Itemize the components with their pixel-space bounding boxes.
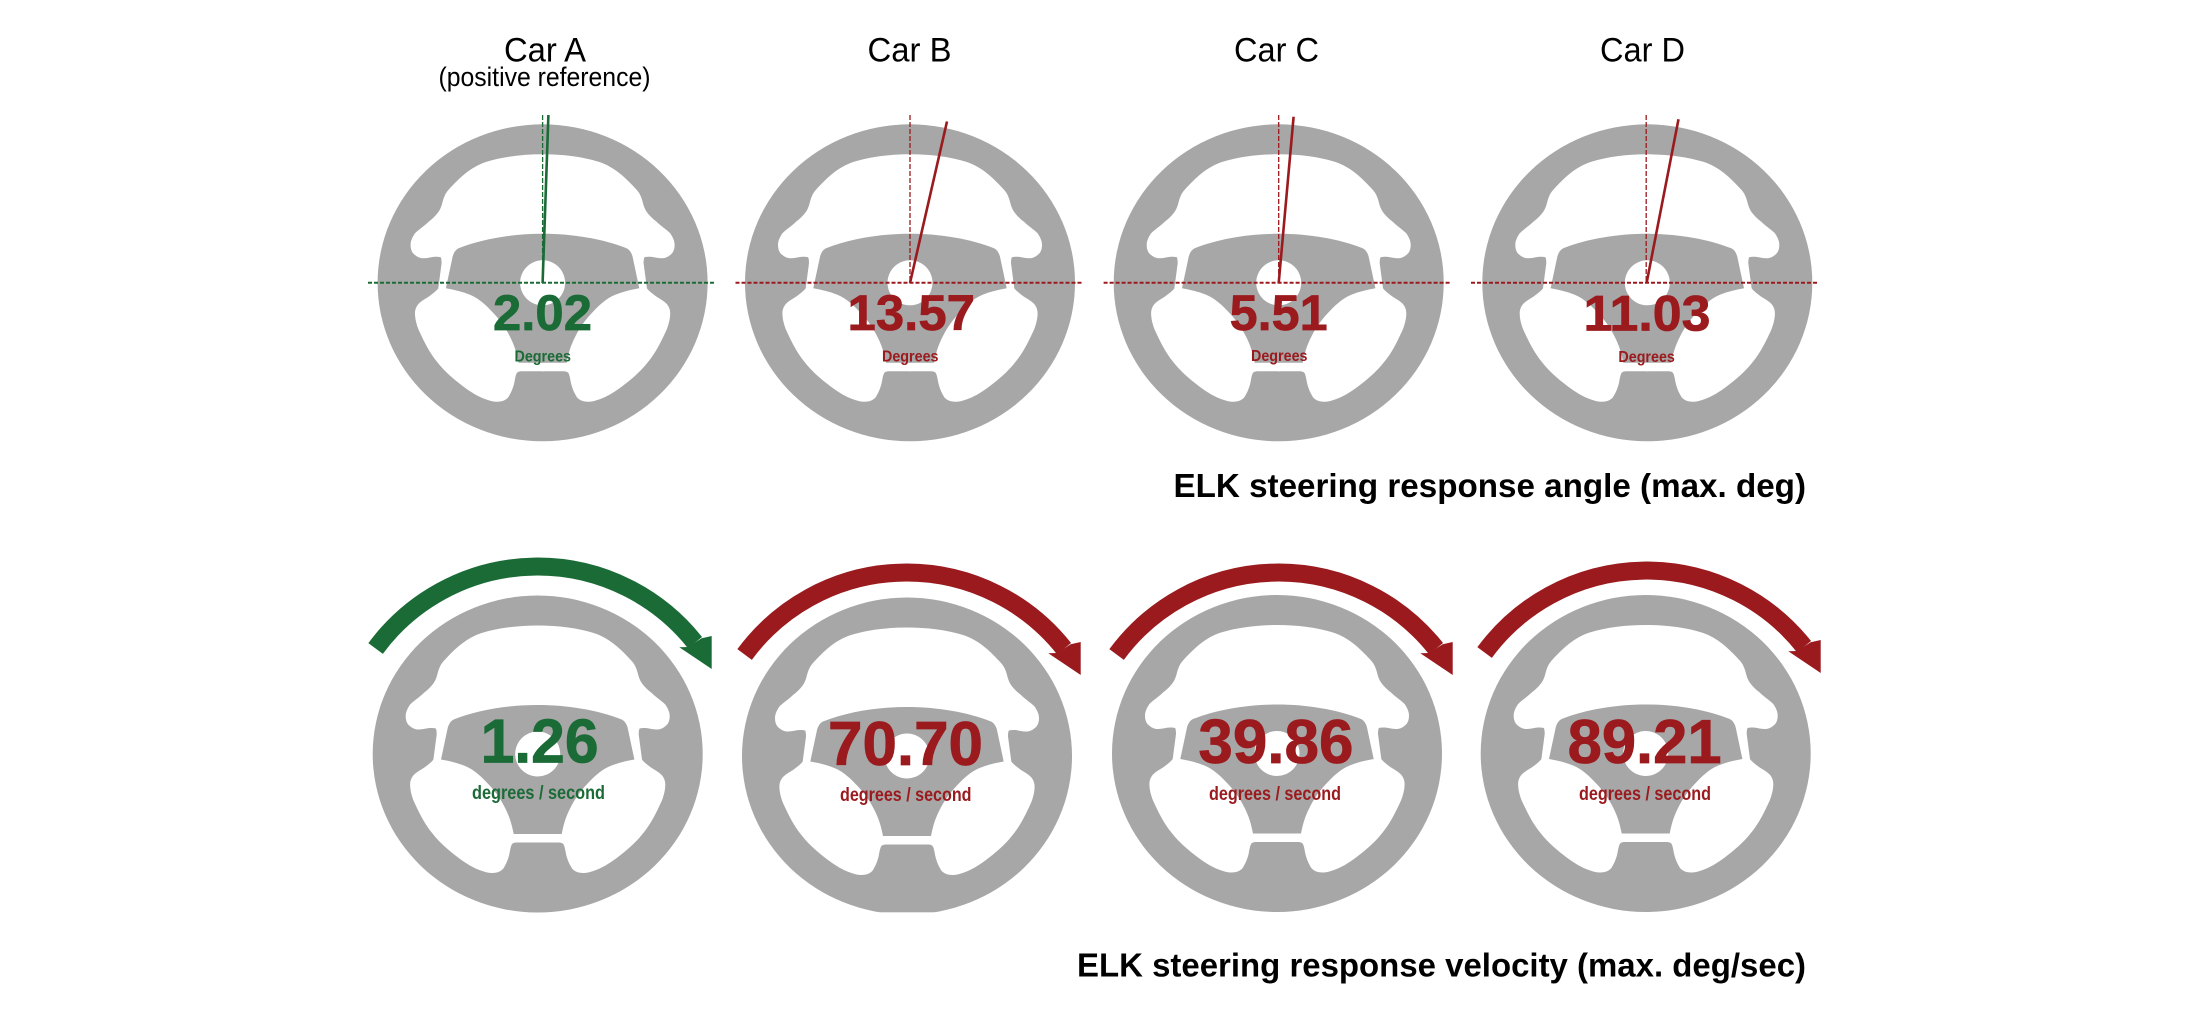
angle gauge: Car B: 13.57 [848, 285, 975, 341]
angle gauge: Car C [1104, 115, 1451, 441]
angle gauge: Car A [368, 115, 716, 441]
velocity gauge: Car A: degrees / second [472, 783, 605, 804]
angle gauge: Car A: 2.02 [493, 285, 592, 341]
angle gauge: Car C: 5.51 [1230, 285, 1328, 341]
angle gauge: Car D: 11.03 [1584, 286, 1710, 342]
velocity gauge: Car C [1112, 573, 1453, 912]
angle gauge: Car D [1471, 115, 1819, 441]
heading: Car C: Car C [1234, 32, 1319, 70]
angle gauge: Car B [736, 115, 1084, 441]
caption: velocity: ELK steering response velocity (max. deg/sec) [1077, 946, 1806, 984]
angle gauge: Car D: Degrees [1618, 349, 1675, 366]
velocity gauge: Car C: degrees / second [1209, 784, 1341, 805]
angle gauge: Car B: Degrees [882, 348, 939, 366]
velocity gauge: Car D [1481, 571, 1821, 912]
velocity gauge: Car D: degrees / second [1579, 784, 1711, 805]
heading: Car A: Car A [504, 32, 586, 70]
velocity gauge: Car D: 89.21 [1568, 708, 1722, 777]
heading: Car A [438, 32, 650, 92]
heading: Car B: Car B [868, 32, 952, 70]
velocity gauge: Car C: 39.86 [1198, 708, 1353, 777]
caption: angle: ELK steering response angle (max. deg) [1174, 467, 1806, 504]
angle gauge: Car C: Degrees [1251, 348, 1308, 365]
velocity gauge: Car B [742, 573, 1081, 916]
velocity gauge: Car B: degrees / second [840, 785, 972, 806]
heading: Car D: Car D [1600, 32, 1685, 70]
heading: Car A: (positive reference) [438, 62, 650, 92]
velocity gauge: Car A [373, 567, 712, 912]
velocity gauge: Car A: 1.26 [481, 708, 599, 777]
angle gauge: Car A: Degrees [514, 348, 571, 366]
velocity gauge: Car B: 70.70 [828, 710, 983, 779]
